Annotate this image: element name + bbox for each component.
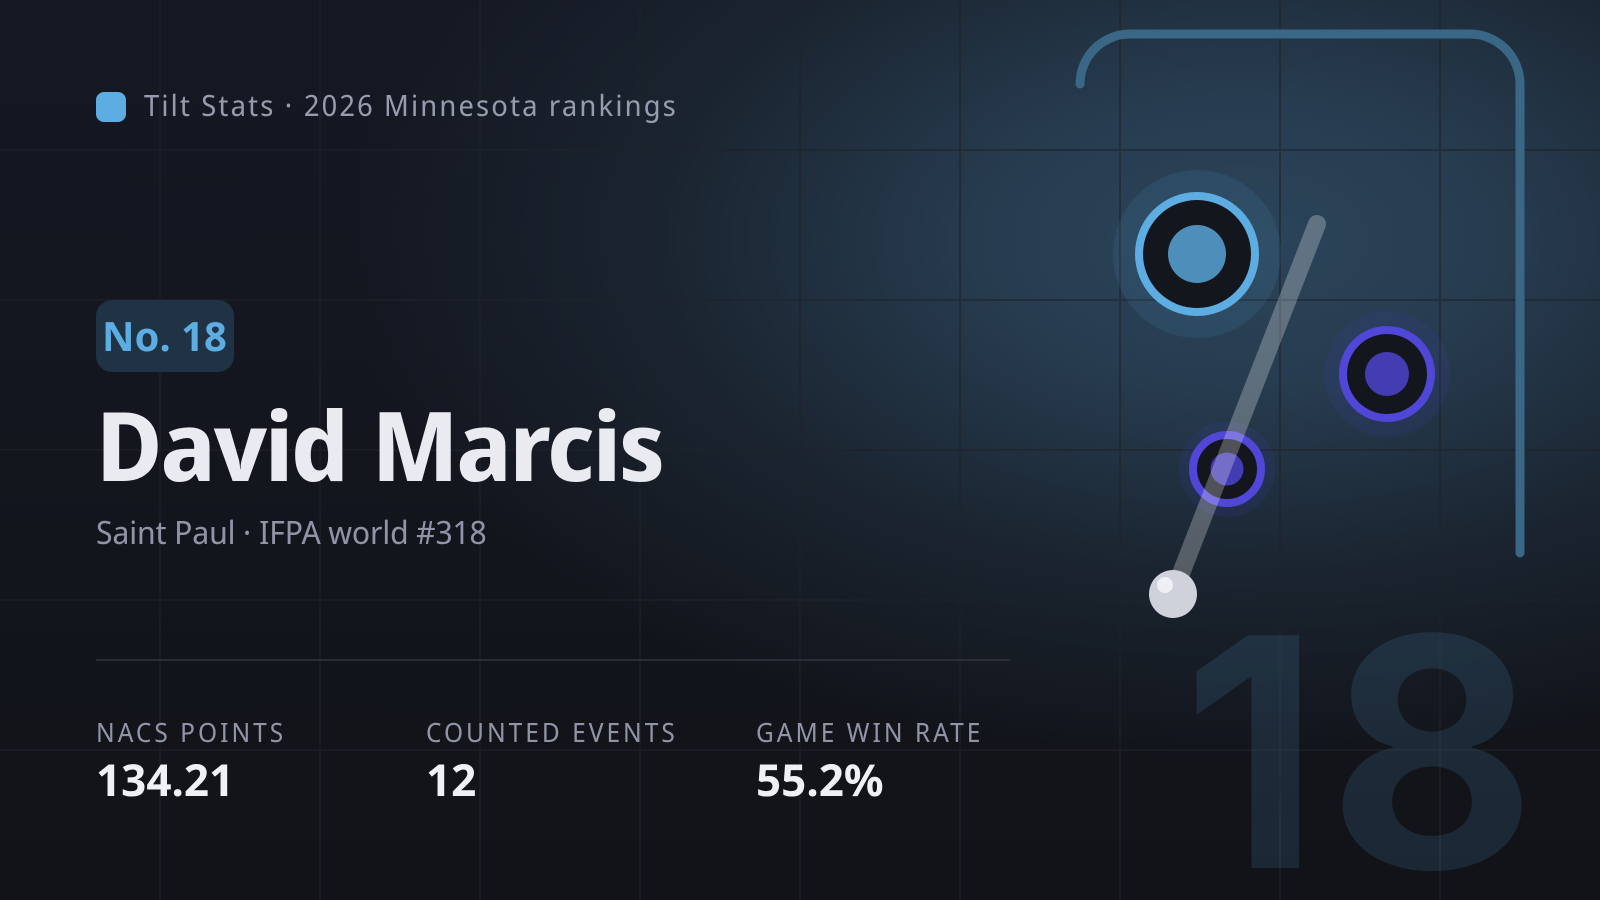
icon: medium bumper <box>1324 311 1450 437</box>
stat label: COUNTED EVENTS <box>426 714 678 750</box>
playfield rail <box>1080 34 1520 553</box>
eyebrow text: Tilt Stats · 2026 Minnesota rankings <box>144 86 678 125</box>
divider <box>96 659 1010 661</box>
stat value: 134.21 <box>96 749 234 809</box>
stat label: NACS POINTS <box>96 714 286 750</box>
icon: pinball <box>1149 570 1197 618</box>
stat label: GAME WIN RATE <box>756 714 983 750</box>
stat: counted events <box>426 714 678 809</box>
player subtitle: Saint Paul · IFPA world #318 <box>96 511 487 554</box>
stat: game win rate <box>756 714 983 809</box>
rank badge text: No. 18 <box>102 308 227 363</box>
stat: NACS points <box>96 714 286 809</box>
brand mark <box>96 92 126 122</box>
icon: small bumper <box>1179 421 1275 517</box>
stat value: 55.2% <box>756 749 884 809</box>
ball trajectory line <box>1173 224 1317 594</box>
icon: large bumper <box>1113 170 1281 338</box>
player name: David Marcis <box>96 379 663 510</box>
stat value: 12 <box>426 749 476 809</box>
rank badge <box>96 300 234 372</box>
